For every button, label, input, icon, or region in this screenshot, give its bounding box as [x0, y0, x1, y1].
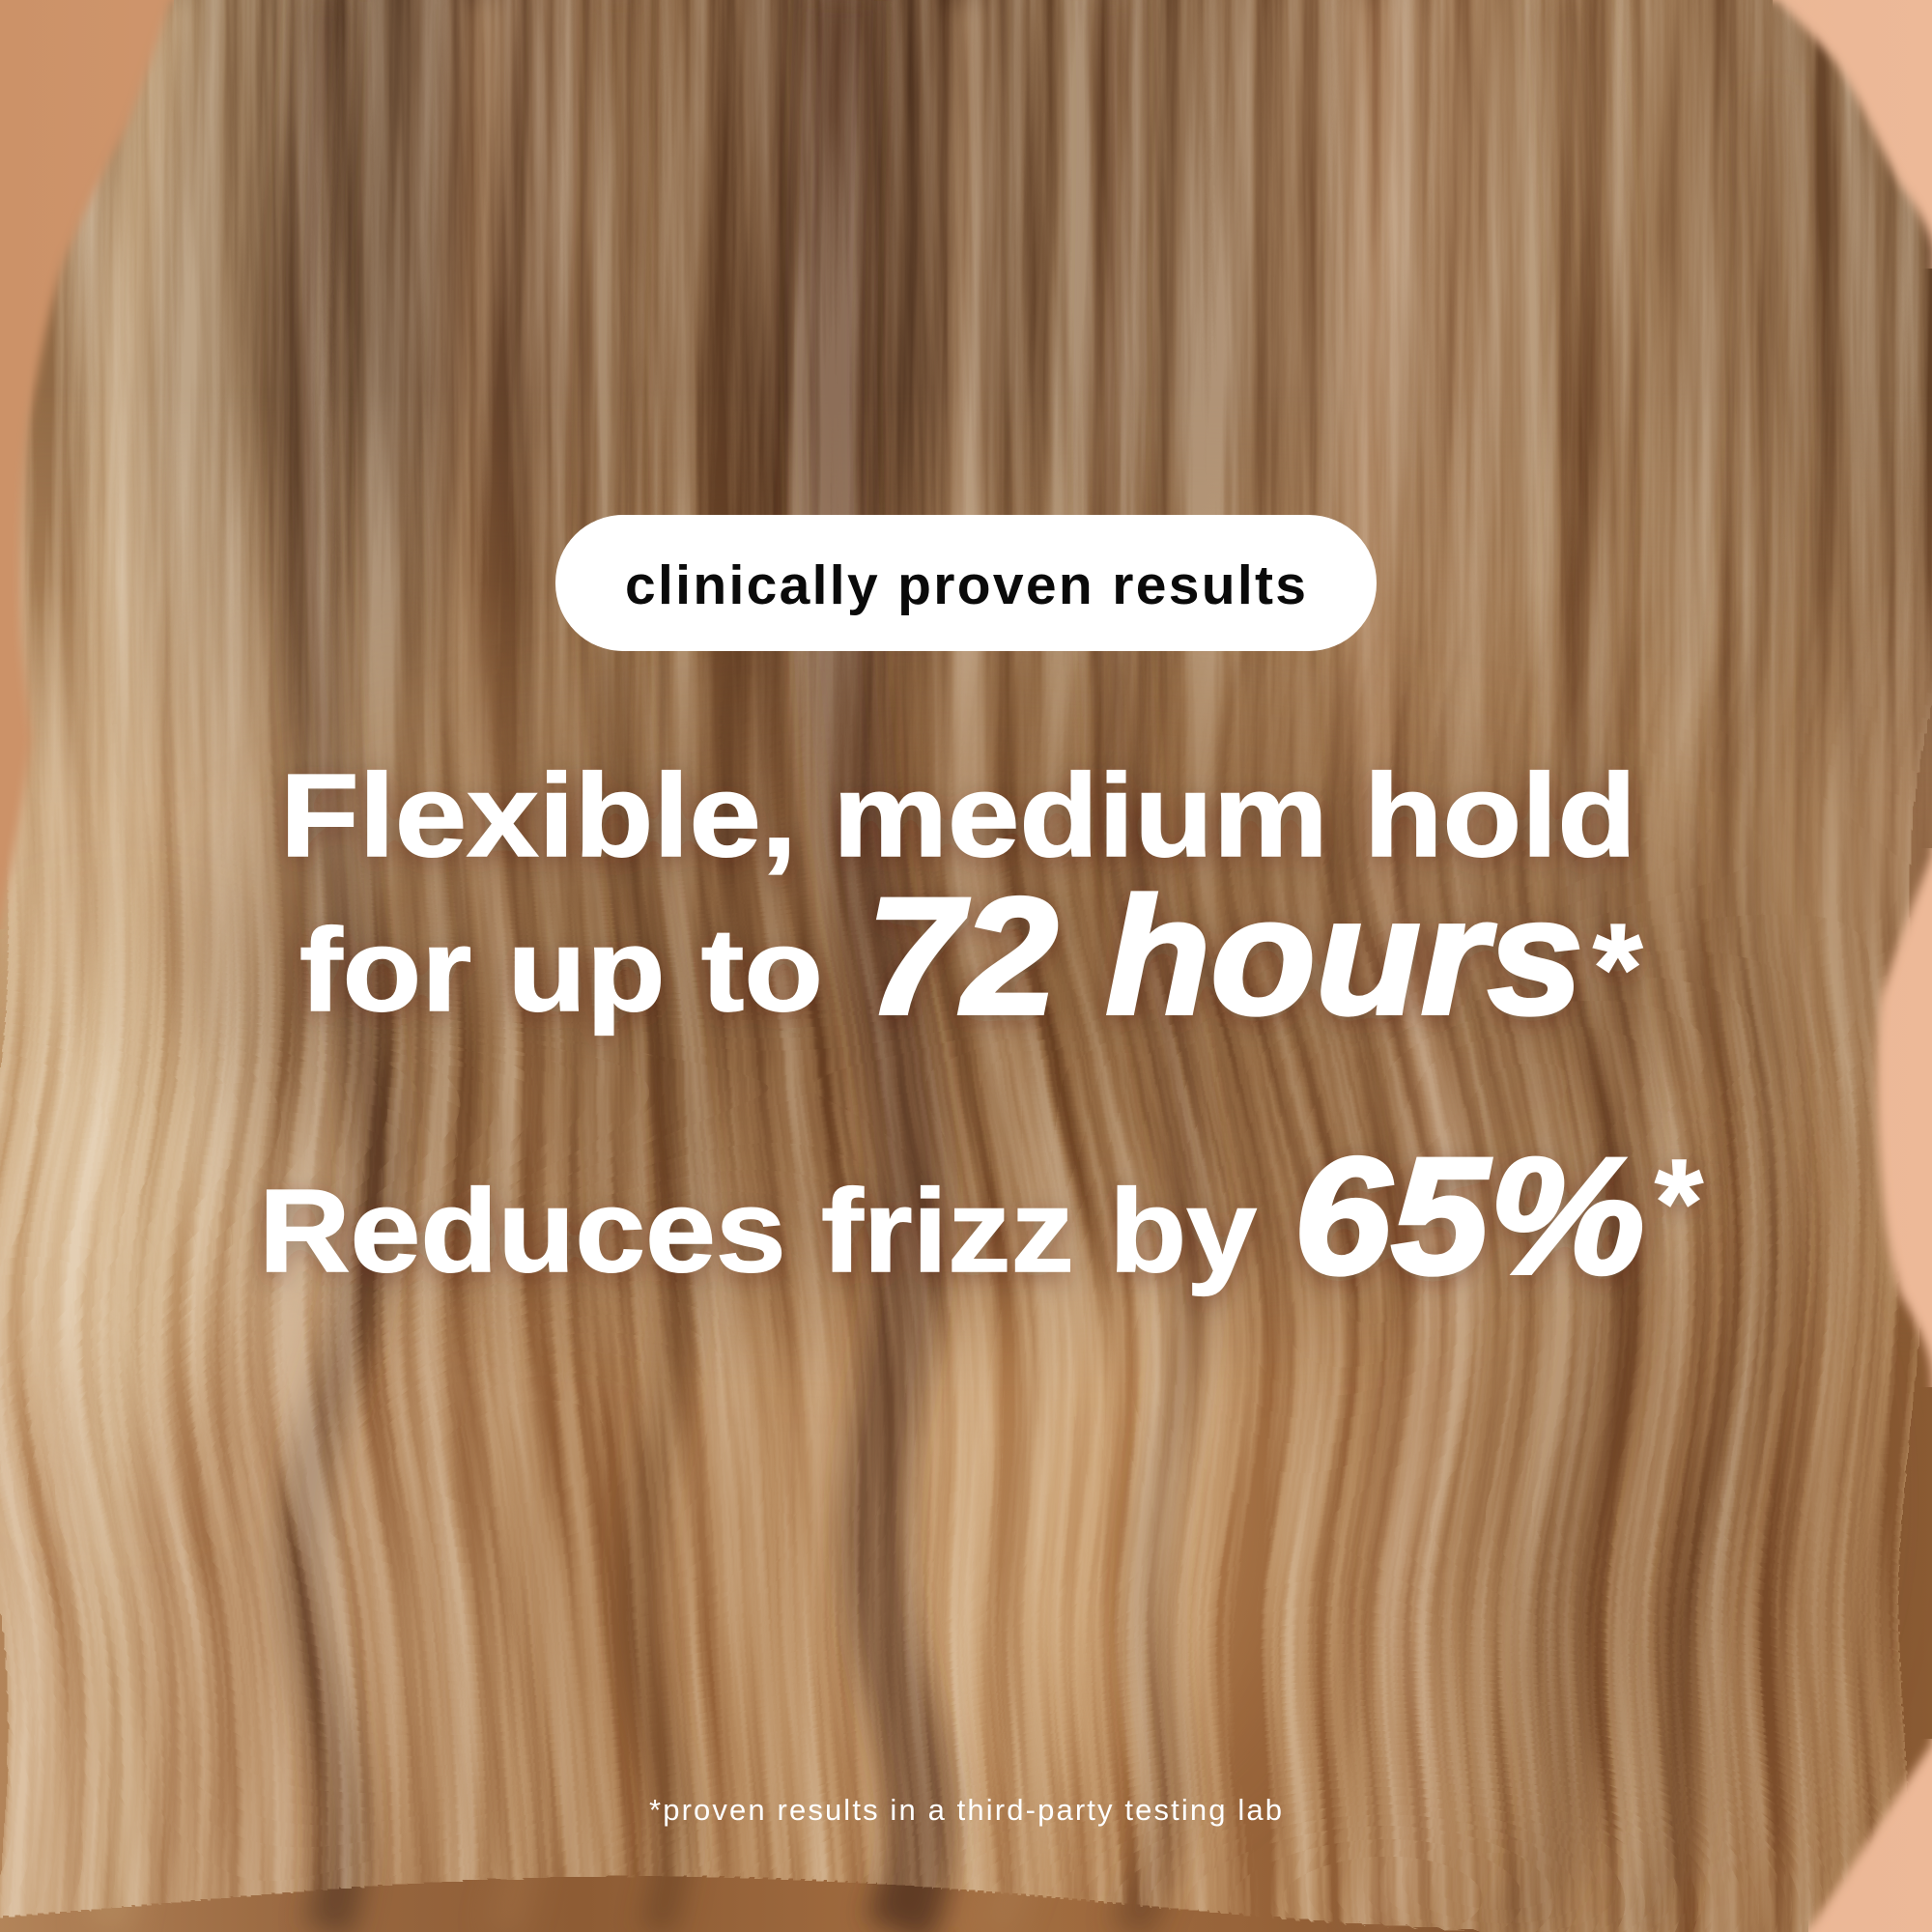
headline: reduces frizz by 65%: 65% [1293, 1123, 1645, 1309]
headline: flexible medium hold for up to 72 hours: 72 hours [867, 864, 1583, 1049]
headline: flexible medium hold for up to 72 hours: * [1593, 897, 1643, 1039]
badge: clinically proven results: clinically proven results [625, 554, 1306, 616]
headline: flexible medium hold for up to 72 hours: for up to [299, 904, 823, 1036]
badge: clinically proven results [555, 515, 1377, 651]
footnote: *proven results in a third-party testing lab [649, 1793, 1282, 1827]
headline: flexible medium hold for up to 72 hours [280, 750, 1643, 1049]
headline: reduces frizz by 65%: Reduces frizz by [259, 1165, 1257, 1296]
headline: flexible medium hold for up to 72 hours: Flexible, medium hold [280, 750, 1636, 881]
headline: reduces frizz by 65% [259, 1123, 1703, 1309]
headline: reduces frizz by 65%: * [1650, 1134, 1703, 1272]
